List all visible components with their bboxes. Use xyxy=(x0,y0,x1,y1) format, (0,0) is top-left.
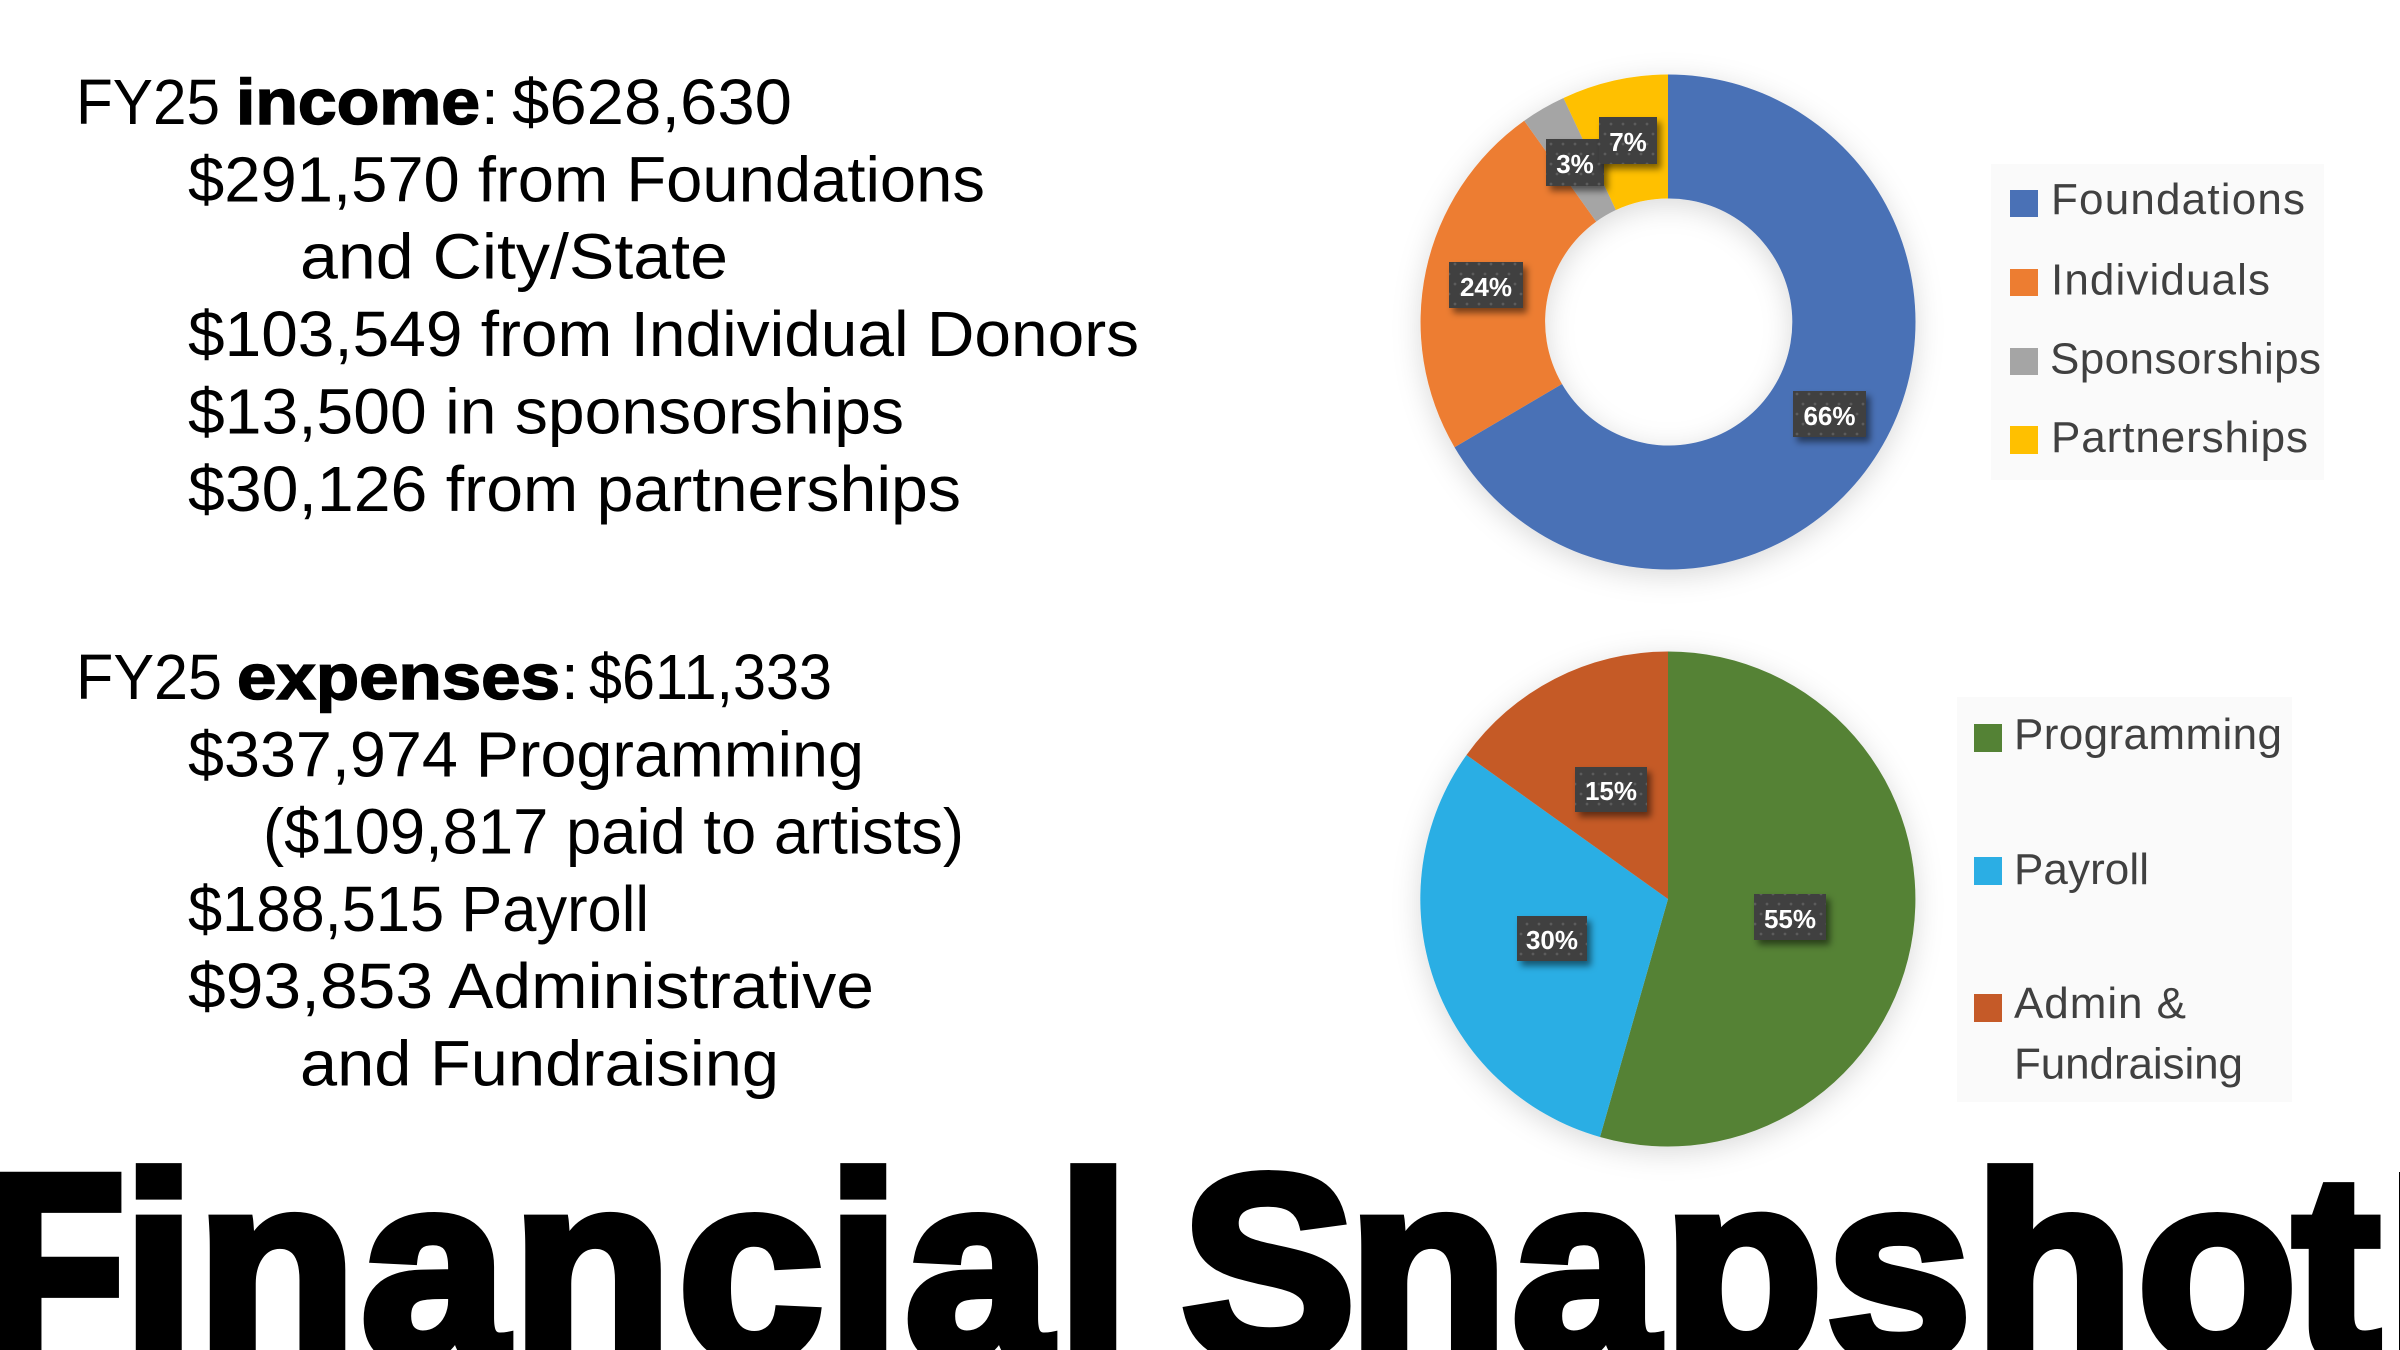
pie slices xyxy=(1420,651,1915,1146)
data label 15% xyxy=(1575,767,1647,812)
income legend xyxy=(1991,164,2324,480)
income donut chart xyxy=(1421,74,1915,570)
expenses heading: FY25 xyxy=(76,641,222,713)
income line: city and state: and City/State xyxy=(300,220,728,292)
legend item: sponsorships: Sponsorships xyxy=(2050,334,2321,384)
data label 3% xyxy=(1546,139,1604,186)
data label 15%: 15% xyxy=(1585,776,1637,806)
expense line: and fundraising: and Fundraising xyxy=(300,1028,779,1100)
data label 30% xyxy=(1517,916,1587,961)
expenses text block xyxy=(76,641,964,1100)
income text block xyxy=(76,66,1139,525)
data label 55%: 55% xyxy=(1764,904,1816,934)
data label 3%: 3% xyxy=(1556,149,1594,179)
expenses heading: $611,333 xyxy=(589,641,832,713)
data label 24%: 24% xyxy=(1460,272,1512,302)
income heading: income xyxy=(236,66,480,138)
donut slices xyxy=(1421,74,1915,570)
legend item: admin and fundraising xyxy=(1974,979,2243,1088)
income heading: $628,630 xyxy=(512,66,792,138)
legend item: individuals: Individuals xyxy=(2051,256,2270,304)
data label 24% xyxy=(1449,262,1523,308)
expenses legend xyxy=(1957,697,2292,1102)
legend item: admin and fundraising: Fundraising xyxy=(2014,1040,2243,1088)
income line: partnerships: $30,126 from partnerships xyxy=(188,453,961,525)
income line: individual donors: $103,549 from Individual Donors xyxy=(188,298,1139,370)
data label 30%: 30% xyxy=(1526,925,1578,955)
income line: sponsorships: $13,500 in sponsorships xyxy=(188,376,904,448)
legend item: admin and fundraising: Admin & xyxy=(2014,979,2186,1028)
legend item: payroll: Payroll xyxy=(2014,845,2149,894)
legend item: partnerships: Partnerships xyxy=(2051,413,2308,462)
income line: foundations: $291,570 from Foundations xyxy=(188,144,985,216)
income heading: FY25 xyxy=(76,66,220,138)
data label 55% xyxy=(1754,894,1826,940)
expense line: payroll: $188,515 Payroll xyxy=(188,873,649,945)
expenses pie chart xyxy=(1420,651,1915,1146)
data label 7% xyxy=(1599,117,1657,164)
expenses heading: : xyxy=(561,641,579,713)
expense line: administrative: $93,853 Administrative xyxy=(188,950,874,1022)
data label 66%: 66% xyxy=(1803,401,1856,431)
expense line: paid to artists: ($109,817 paid to artists) xyxy=(263,796,964,868)
legend item: programming: Programming xyxy=(2014,710,2282,759)
expenses heading: expenses xyxy=(237,641,560,713)
legend item: foundations: Foundations xyxy=(2051,175,2305,224)
expenses heading xyxy=(76,641,832,713)
income heading xyxy=(76,66,792,138)
data label 7%: 7% xyxy=(1609,127,1647,157)
income heading: : xyxy=(481,66,499,138)
data label 66% xyxy=(1793,391,1866,437)
expense line: programming: $337,974 Programming xyxy=(188,718,864,790)
